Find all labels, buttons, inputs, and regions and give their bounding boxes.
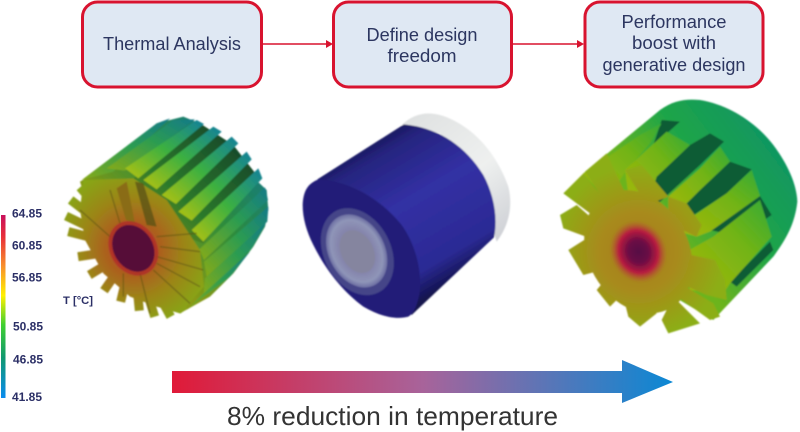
radial face of heat sink <box>66 178 204 317</box>
face hot spot <box>599 211 678 293</box>
arrow: step 1 to step 2 <box>262 40 333 48</box>
dark slots through shell <box>648 120 773 287</box>
blue cylinder side <box>317 124 496 315</box>
caption: 8% reduction in temperature <box>227 401 558 431</box>
step box: define design freedom: Define design <box>366 25 478 45</box>
legend values: 64.85 <box>12 208 43 220</box>
generative heat sink with thermal map <box>560 100 797 333</box>
legend values <box>12 208 44 404</box>
heat sink body <box>80 117 268 313</box>
upper fins <box>82 118 262 242</box>
side fins <box>187 187 268 310</box>
translucent back ring <box>402 114 510 242</box>
legend values: 46.85 <box>13 354 44 366</box>
temperature colour legend <box>1 208 93 404</box>
legend unit label: T [°C] <box>63 295 93 307</box>
step box: performance boost with generative design: Performance <box>622 12 726 32</box>
design space cylinder <box>303 114 510 318</box>
legend values: 60.85 <box>12 240 43 252</box>
step box: performance boost with generative design: generative design <box>602 55 746 75</box>
legend values: 56.85 <box>12 272 43 284</box>
legend colour bar <box>1 215 6 398</box>
gear face <box>560 153 727 333</box>
step box: define design freedom <box>334 2 512 87</box>
hot spot on heat sink <box>98 212 168 285</box>
temperature reduction arrow <box>172 360 673 403</box>
legend values: 41.85 <box>12 392 43 404</box>
flowchart <box>82 2 763 87</box>
gaps between fins <box>132 123 257 243</box>
step box: thermal analysis: Thermal Analysis <box>103 34 241 54</box>
outer shell <box>583 100 797 320</box>
lens housing <box>306 195 408 308</box>
arrow: step 2 to step 3 <box>512 40 584 48</box>
step box: performance boost with generative design <box>585 2 763 87</box>
blue front face <box>303 179 420 318</box>
extruded teeth <box>583 123 772 293</box>
step box: performance boost with generative design: boost with <box>632 33 716 53</box>
step box: define design freedom: freedom <box>388 46 456 66</box>
legend values: 50.85 <box>13 322 44 334</box>
step box: thermal analysis <box>82 2 262 87</box>
heat sink with thermal map <box>66 117 268 317</box>
